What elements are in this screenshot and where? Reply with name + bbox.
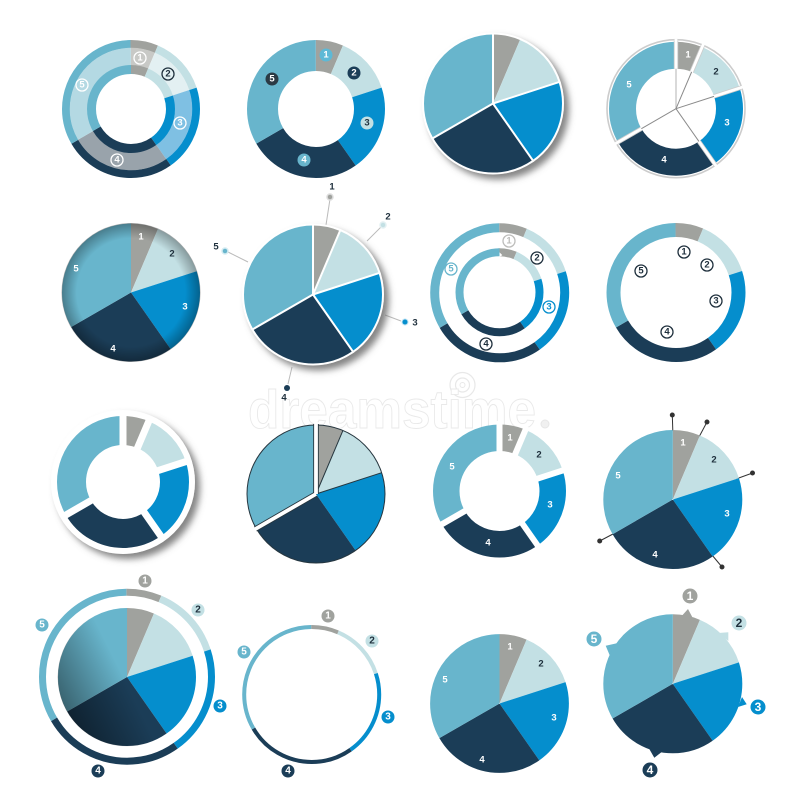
shadow disc	[51, 410, 195, 554]
slice gaps	[432, 32, 561, 162]
inner band	[92, 70, 170, 148]
ring	[244, 627, 379, 762]
watermark: dreamstime	[248, 380, 536, 440]
number badges	[266, 48, 374, 166]
chart: pie with callout dots	[213, 182, 418, 404]
number badges: 3	[713, 296, 719, 306]
chart: pie with pointer spikes	[586, 588, 766, 778]
chart: exploded donut with shadow	[51, 410, 195, 554]
chart: donut with filled badges	[262, 48, 374, 166]
chart: thin ring	[238, 610, 394, 778]
number badges: 2	[736, 616, 743, 630]
dark shading	[58, 608, 196, 746]
number badges: 4	[285, 766, 291, 776]
numbers: 3	[724, 118, 730, 128]
number badges: 2	[351, 68, 357, 78]
inner ring	[460, 252, 540, 332]
number badges: 2	[165, 68, 171, 80]
number badges: 2	[195, 604, 201, 616]
ring	[614, 230, 738, 355]
numbers: 2	[536, 450, 542, 460]
numbers: 5	[449, 462, 455, 472]
numbers	[442, 642, 557, 766]
chart: pie with shaded edge	[62, 223, 200, 362]
numbers: 1	[507, 432, 513, 444]
outline	[607, 40, 745, 178]
number badges: 1	[506, 236, 512, 246]
number badges: 2	[534, 252, 540, 264]
spokes	[615, 39, 743, 166]
shadow disc	[242, 224, 384, 366]
chart: donut with spokes	[607, 39, 745, 178]
numbers: 4	[110, 344, 116, 354]
donut segments	[72, 430, 174, 534]
numbers	[615, 438, 730, 560]
chart: double ring	[435, 228, 565, 358]
number badges	[76, 52, 186, 166]
chart: pie with pin lines	[598, 413, 754, 569]
pie slices	[92, 642, 162, 712]
numbers	[626, 50, 730, 166]
number badges	[635, 246, 722, 338]
pin lines	[598, 413, 754, 569]
pie slices	[638, 649, 708, 719]
numbers: 1	[680, 438, 686, 448]
outer ring	[435, 228, 565, 358]
numbers: 4	[652, 550, 658, 560]
number badges: 5	[39, 620, 45, 630]
edge shading	[62, 223, 200, 362]
number badges: 1	[325, 610, 331, 622]
numbers	[449, 432, 553, 548]
number badges: 3	[546, 302, 552, 312]
outer ring	[42, 592, 212, 761]
number badges: 4	[483, 338, 489, 350]
number badges: 3	[217, 700, 223, 712]
callout dots and numbers: 1	[329, 182, 335, 192]
number badges: 3	[364, 118, 370, 128]
pie slices	[458, 69, 528, 138]
number badges: 3	[755, 700, 762, 714]
chart: separated donut	[439, 421, 566, 548]
chart: plain pie	[442, 642, 557, 766]
number badges: 5	[448, 264, 454, 274]
callout dots and numbers: 2	[385, 212, 391, 222]
numbers: 1	[507, 642, 513, 652]
segment gaps	[64, 414, 188, 538]
number badges: 1	[323, 50, 329, 60]
numbers: 5	[626, 80, 632, 90]
pie slices	[465, 669, 534, 738]
number badges: 3	[177, 118, 183, 128]
numbers: 4	[479, 754, 485, 766]
number badges: 1	[137, 52, 143, 64]
numbers: 4	[661, 154, 667, 166]
numbers: 2	[711, 454, 717, 466]
middle pale band	[78, 56, 184, 162]
callout lines	[228, 199, 401, 384]
number badges	[445, 235, 555, 350]
numbers: 2	[538, 658, 544, 670]
numbers: 3	[724, 508, 730, 520]
donut segments	[446, 438, 553, 544]
number badges: 4	[664, 326, 670, 338]
numbers: 3	[551, 712, 557, 724]
numbers	[73, 232, 188, 354]
number badges: 4	[647, 763, 654, 777]
number badges: 5	[79, 80, 85, 90]
number badges	[36, 574, 226, 778]
callout dots and numbers: 4	[281, 392, 287, 404]
numbers: 2	[713, 66, 719, 78]
chart: pie with drop shadow	[422, 32, 564, 174]
numbers: 5	[615, 470, 621, 482]
callout dots and numbers: 5	[213, 242, 219, 252]
number badges: 1	[681, 246, 687, 258]
number badges: 3	[385, 712, 391, 722]
pie slices	[282, 460, 350, 528]
outer band	[66, 44, 196, 174]
numbers: 1	[685, 50, 691, 60]
numbers: 3	[547, 500, 553, 510]
slice gaps	[252, 224, 381, 353]
numbers: 2	[169, 248, 175, 260]
callout dots and numbers: 3	[412, 318, 418, 328]
numbers: 3	[182, 302, 188, 312]
pie slices	[638, 464, 708, 534]
pointer spikes	[606, 609, 747, 758]
donut segments	[622, 55, 730, 162]
donut segments	[262, 56, 370, 162]
numbers: 5	[442, 674, 448, 686]
pie slices	[96, 258, 166, 327]
numbers: 5	[73, 264, 79, 274]
number badges	[238, 610, 394, 778]
numbers: 1	[138, 232, 144, 242]
number badges: 5	[591, 632, 598, 646]
slice borders	[254, 422, 382, 530]
chart: ring with inner badges	[614, 230, 738, 355]
number badges: 1	[687, 589, 694, 603]
numbers: 4	[485, 538, 491, 548]
number badges: 5	[241, 646, 247, 658]
callout dots and numbers	[213, 182, 418, 404]
chart: pie inside thin ring	[36, 574, 226, 778]
number badges: 4	[114, 154, 120, 166]
chart: outlined pie	[247, 422, 385, 563]
number badges	[586, 588, 766, 778]
segment gaps	[439, 421, 566, 548]
number badges: 2	[704, 260, 710, 270]
number badges: 5	[269, 74, 275, 84]
chart: triple band donut	[66, 44, 196, 174]
number badges: 5	[638, 266, 644, 276]
shadow disc	[422, 32, 564, 174]
number badges: 1	[142, 576, 148, 586]
number badges: 4	[95, 766, 101, 776]
number badges: 2	[369, 636, 375, 646]
pie slices	[278, 260, 348, 329]
number badges: 4	[301, 154, 307, 166]
outline	[247, 425, 385, 563]
